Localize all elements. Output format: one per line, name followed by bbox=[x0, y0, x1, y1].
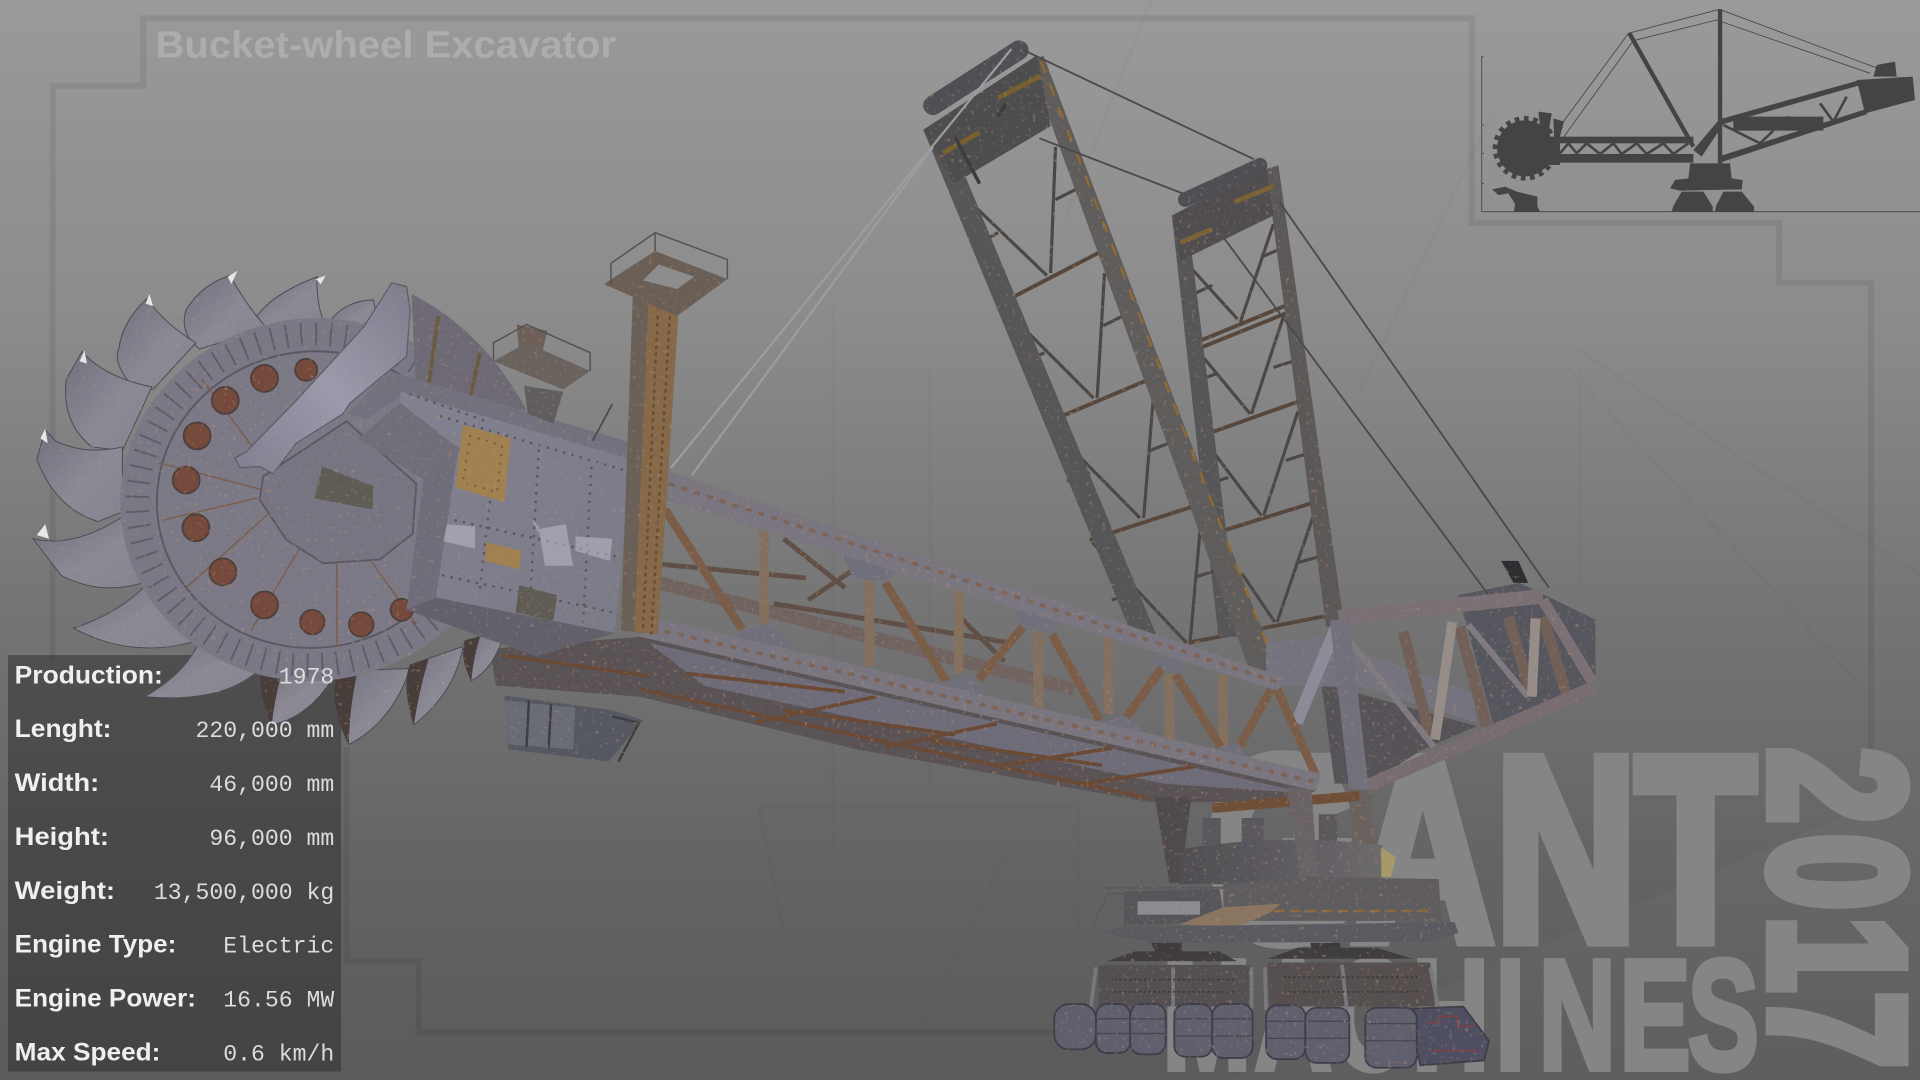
box dark plate bbox=[516, 585, 557, 621]
excavator: cables bbox=[671, 49, 1549, 594]
excavator: boom truss members bbox=[640, 471, 1321, 791]
box rivet lines bbox=[410, 394, 624, 627]
specs panel text bbox=[15, 661, 334, 1067]
spec: production bbox=[15, 661, 334, 690]
excavator: counter jib bbox=[1266, 561, 1596, 823]
spec: max speed: 0.6 km/h bbox=[223, 1041, 334, 1067]
base tanks bbox=[1202, 814, 1337, 845]
excavator: wheel hub bbox=[260, 421, 416, 563]
spec: engine type: Electric bbox=[223, 934, 334, 960]
jib lower floor bbox=[1321, 683, 1477, 784]
base centre leg bbox=[1287, 786, 1318, 877]
excavator: far side truss bbox=[659, 539, 1074, 689]
front tower rails bbox=[923, 122, 1157, 637]
excavator: front tower bbox=[923, 50, 1280, 676]
excavator: tall tower bbox=[604, 251, 727, 634]
excavator: base bbox=[1090, 786, 1458, 955]
silhouette: masts bbox=[1629, 9, 1720, 163]
box top strip bbox=[348, 371, 633, 460]
spec: length: Lenght: bbox=[15, 715, 111, 743]
boom upper chord bbox=[665, 471, 1283, 691]
wheel spokes bbox=[159, 380, 416, 647]
tall tower column bbox=[621, 288, 680, 634]
silhouette: counter jib bbox=[1693, 62, 1915, 163]
spec: production: Production: bbox=[15, 661, 163, 689]
box bottom face bbox=[407, 598, 615, 656]
hub plate bbox=[315, 467, 373, 509]
scale axis and ground line bbox=[1482, 57, 1920, 212]
excavator: boom underside bbox=[490, 637, 1316, 802]
boom lower chord bbox=[640, 618, 1321, 791]
size comparison silhouette inset bbox=[1482, 9, 1920, 212]
spec: height: Height: bbox=[15, 823, 109, 851]
spec: engine type bbox=[15, 931, 334, 960]
white tooth tips bbox=[37, 271, 326, 539]
tall tower platform bbox=[604, 251, 727, 316]
excavator: bucket wheel disc bbox=[97, 293, 530, 706]
excavator: boom head box bbox=[348, 371, 633, 656]
spec: engine type: Engine Type: bbox=[15, 931, 176, 959]
spec: max speed: Max Speed: bbox=[15, 1038, 160, 1066]
spec: height: 96,000 mm bbox=[209, 826, 334, 852]
spec: engine power: Engine Power: bbox=[15, 985, 196, 1013]
spec: width bbox=[15, 769, 334, 798]
silhouette: bucket wheel bbox=[1495, 118, 1555, 178]
spec: production: 1978 bbox=[279, 664, 334, 690]
base operator cabin bbox=[1090, 888, 1224, 931]
excavator: wheel guard behind arm bbox=[411, 294, 527, 410]
silhouette: digging boom bbox=[1538, 112, 1693, 165]
spec: width: 46,000 mm bbox=[209, 772, 334, 798]
spec: length: 220,000 mm bbox=[196, 718, 334, 744]
spec: weight: 13,500,000 kg bbox=[154, 880, 334, 906]
back tower head beam and cylinder bbox=[1172, 165, 1273, 261]
giant watermark logo text bbox=[1162, 703, 1920, 1080]
back tower truss bars bbox=[1188, 224, 1326, 643]
base deck plate bbox=[1102, 922, 1458, 943]
spec: max speed bbox=[15, 1038, 334, 1067]
box front face bbox=[400, 392, 631, 633]
box side block bbox=[359, 403, 460, 480]
box reflections bbox=[443, 519, 612, 566]
specs panel background bbox=[8, 655, 341, 1071]
spec: length bbox=[15, 715, 334, 744]
wheel brown circles bbox=[173, 359, 413, 637]
jib end box bbox=[1458, 583, 1596, 726]
base support legs bbox=[1155, 797, 1191, 883]
jib interior conveyor bbox=[1266, 637, 1477, 722]
excavator bbox=[33, 50, 1596, 1068]
back tower rails bbox=[1172, 211, 1239, 637]
excavator: small tower bbox=[493, 324, 612, 441]
spec: weight: Weight: bbox=[15, 877, 115, 905]
box orange plate bbox=[456, 425, 511, 502]
railings bbox=[493, 233, 727, 371]
watermark: GIANT: GIANT bbox=[1206, 703, 1756, 996]
front tower truss bars bbox=[959, 147, 1220, 643]
excavator: operator cab under boom bbox=[504, 696, 643, 762]
base lower drum bbox=[1223, 877, 1441, 921]
faint background ghost structures bbox=[759, 0, 1920, 1080]
title: Bucket-wheel Excavator bbox=[156, 25, 616, 67]
excavator: back tower bbox=[1172, 165, 1344, 643]
base upper drum bbox=[1179, 840, 1382, 884]
spec: engine power bbox=[15, 985, 334, 1014]
silhouette: small excavator bbox=[1492, 187, 1540, 212]
box small orange plate bbox=[485, 542, 522, 569]
jib truss bbox=[1297, 596, 1596, 823]
spec: width: Width: bbox=[15, 769, 99, 797]
spec: weight bbox=[15, 877, 334, 906]
front tower head beam and cylinder bbox=[923, 50, 1051, 184]
excavator: bucket wheel teeth bbox=[33, 271, 504, 744]
crawler frames bbox=[1091, 948, 1439, 1010]
crawler tracks bbox=[1054, 1004, 1489, 1068]
boom gusset plates bbox=[736, 553, 1245, 758]
base ramp bbox=[1179, 904, 1281, 927]
dark bucket interiors bbox=[260, 637, 480, 744]
jib winch bbox=[1501, 561, 1528, 583]
spec: engine power: 16.56 MW bbox=[223, 988, 334, 1014]
silhouette: cables bbox=[1563, 9, 1887, 137]
spec: height bbox=[15, 823, 334, 852]
excavator: crawlers bbox=[1054, 948, 1489, 1068]
silhouette: base and crawlers bbox=[1670, 163, 1754, 212]
excavator: wheel arm tube bbox=[235, 283, 410, 474]
crawler end detail bbox=[1427, 1016, 1479, 1051]
